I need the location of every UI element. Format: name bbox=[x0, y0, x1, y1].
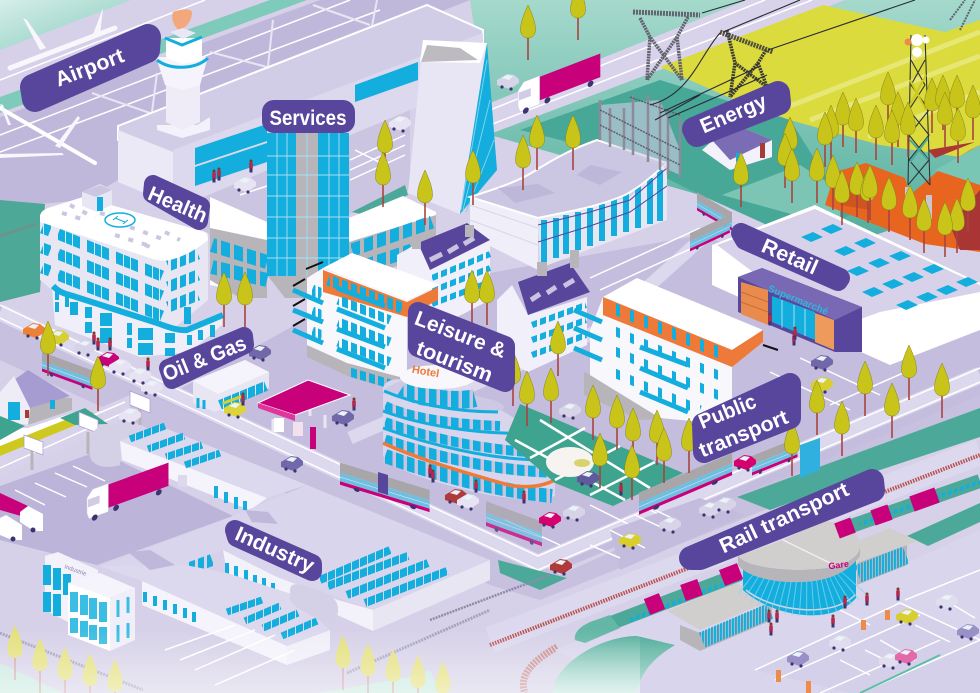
bottom-left verge and hedges bbox=[0, 610, 490, 693]
energy house bbox=[702, 123, 772, 170]
park bbox=[505, 404, 683, 506]
label: Health: Health bbox=[145, 182, 211, 228]
forest clearing bbox=[825, 142, 980, 252]
rail tracks bbox=[430, 452, 980, 693]
office blocks: Industrie bbox=[63, 564, 88, 578]
label: Services bbox=[262, 100, 355, 133]
landscape: top-left meadow bbox=[0, 0, 470, 302]
label: Oil & Gas: Oil & Gas bbox=[159, 332, 250, 386]
bottom fade bbox=[0, 630, 640, 693]
road network bbox=[0, 228, 980, 600]
bottom-right station plaza bbox=[553, 530, 980, 693]
label: Airport: Airport bbox=[52, 44, 127, 92]
petrol station bbox=[258, 380, 350, 449]
label: Public transport: transport bbox=[696, 406, 791, 462]
tall glass tower bbox=[408, 40, 497, 214]
industry main building bbox=[100, 485, 490, 685]
left house bbox=[0, 370, 108, 456]
people bbox=[92, 160, 900, 636]
industry plot upper building bbox=[90, 419, 307, 510]
station building bbox=[667, 521, 918, 651]
control tower bbox=[156, 9, 210, 138]
office blocks bbox=[45, 552, 135, 651]
label: Leisure & tourism: tourism bbox=[413, 337, 496, 387]
trees bbox=[40, 0, 980, 500]
label: Retail bbox=[741, 233, 840, 281]
airport planes bbox=[0, 0, 377, 163]
label: Leisure & tourism bbox=[411, 307, 509, 387]
oil and gas shop bbox=[193, 360, 269, 412]
station building: Gare bbox=[828, 559, 849, 571]
pylons and power lines bbox=[633, 0, 975, 120]
label: Industry: Industry bbox=[232, 522, 318, 578]
label: Energy: Energy bbox=[697, 90, 770, 138]
green strips by railway bbox=[498, 408, 980, 590]
label: Retail: Retail bbox=[758, 235, 821, 280]
billboards bbox=[24, 391, 150, 470]
vehicles: trucks bbox=[0, 53, 600, 541]
hospital bbox=[40, 184, 223, 357]
label: Rail transport: Rail transport bbox=[716, 478, 853, 558]
supermarket and retail park: Supermarché bbox=[766, 284, 830, 318]
hotel bbox=[383, 364, 555, 499]
services complex bbox=[210, 133, 436, 298]
label: Services: Services bbox=[270, 107, 346, 130]
apartment block left bbox=[293, 253, 440, 392]
substation bbox=[600, 95, 680, 178]
label: Public transport: Public bbox=[695, 390, 760, 434]
hotel: Hotel bbox=[411, 364, 440, 380]
landscape: top-right meadow and yellow field bbox=[470, 0, 980, 250]
telecom mast bbox=[904, 34, 932, 219]
train bbox=[575, 481, 980, 643]
apartment block right bbox=[574, 278, 778, 425]
french townhouses bbox=[397, 223, 590, 372]
label: Public transport bbox=[695, 384, 791, 462]
vehicles: buses and trams bbox=[42, 192, 820, 548]
supermarket and retail park bbox=[712, 205, 980, 365]
airport terminal bbox=[118, 5, 483, 250]
label: Airport bbox=[33, 37, 148, 99]
parking lots bbox=[0, 358, 910, 570]
pale foreground trees bbox=[8, 625, 450, 693]
wave office building bbox=[470, 140, 667, 270]
label: Leisure & tourism: Leisure & bbox=[411, 307, 509, 363]
